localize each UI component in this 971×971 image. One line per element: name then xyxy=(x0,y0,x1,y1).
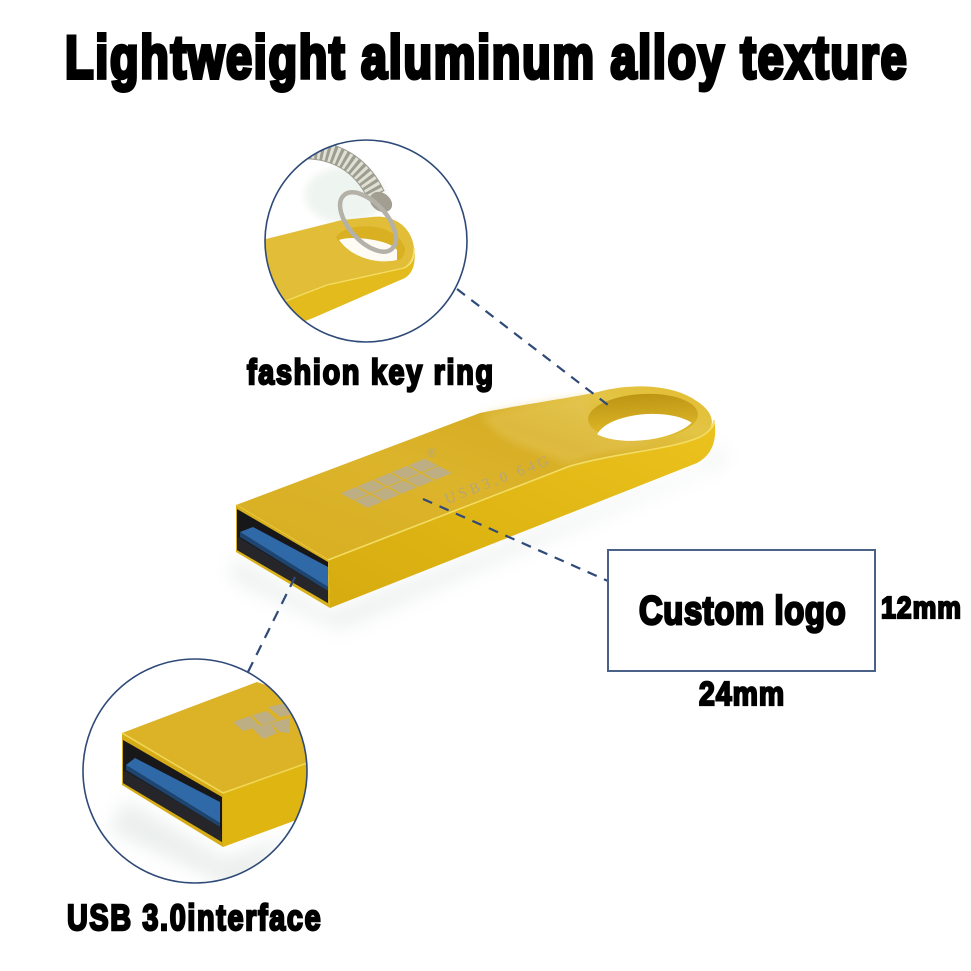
dashed connector: logo xyxy=(423,499,608,581)
chain clasp xyxy=(370,192,392,212)
custom logo box xyxy=(608,550,875,671)
label: USB 3.0 interface: USB 3.0interface xyxy=(67,897,321,938)
title: Lightweight aluminum alloy texture xyxy=(65,24,907,91)
interface port xyxy=(122,733,223,847)
drive end top xyxy=(266,216,414,300)
drive shadow xyxy=(232,445,725,630)
drive top face xyxy=(236,386,712,560)
registered mark: ® xyxy=(425,445,438,461)
edge highlight xyxy=(283,248,414,302)
drive end side xyxy=(286,247,415,321)
engraved logo xyxy=(341,459,452,508)
key ring hole xyxy=(336,226,405,261)
main USB drive photo xyxy=(232,386,725,630)
drive side face xyxy=(328,418,715,608)
width dimension: 24mm xyxy=(699,675,784,713)
textured ring shoulder xyxy=(482,395,665,465)
interface edge highlight xyxy=(122,733,310,793)
chain xyxy=(300,150,376,195)
engraved capacity text: USB3.0 64G xyxy=(443,453,551,508)
split ring xyxy=(338,190,398,254)
detail circle: key ring xyxy=(262,140,467,342)
USB port front xyxy=(236,505,330,608)
height dimension: 12mm xyxy=(881,591,961,626)
front rim highlight xyxy=(236,505,328,560)
label: fashion key ring: fashion key ring xyxy=(247,352,493,392)
edge highlight xyxy=(328,420,714,560)
dashed connector: key ring xyxy=(457,289,608,405)
dashed connector: USB port xyxy=(247,577,295,674)
custom logo text: Custom logo xyxy=(639,588,846,633)
port shadow xyxy=(113,804,274,880)
detail circle: USB interface xyxy=(83,659,310,890)
interface top face xyxy=(122,682,310,793)
ring hole xyxy=(588,394,698,441)
key ring shadow xyxy=(305,167,385,223)
interface side face xyxy=(223,762,310,847)
interface logo xyxy=(233,702,290,739)
